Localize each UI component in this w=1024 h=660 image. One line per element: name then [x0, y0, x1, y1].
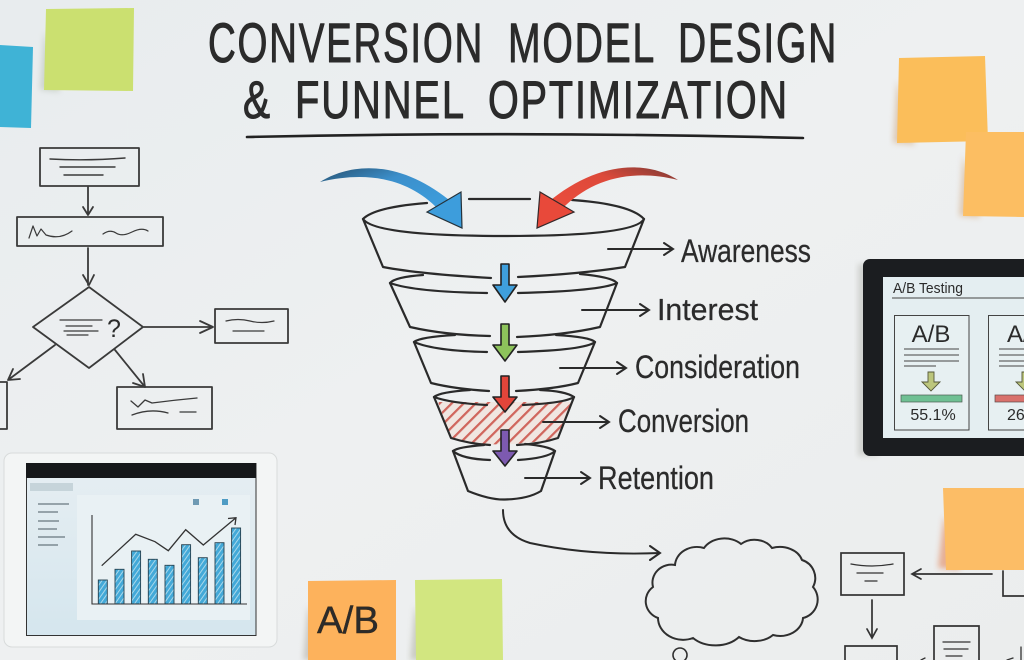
sticky note: orange A/B: A/B [317, 600, 379, 642]
flow arrow down right [115, 350, 145, 387]
step arrow blue [493, 264, 517, 302]
title word: OPTIMIZATION: OPTIMIZATION [488, 71, 789, 130]
partial arrow marks [921, 647, 1021, 660]
flow box 2 [17, 217, 163, 246]
tablet screen [883, 277, 1024, 438]
label: conversion: Conversion [618, 403, 749, 439]
funnel stage 4: conversion hatched [434, 390, 574, 445]
thought cloud [646, 538, 818, 660]
flow arrow down left [8, 345, 55, 380]
title word: DESIGN: DESIGN [678, 11, 838, 74]
decision diamond: ? [107, 315, 121, 343]
tablet shadow [858, 264, 878, 456]
funnel stage 2 [390, 274, 617, 337]
sticky note: orange right [959, 132, 1024, 218]
partial box right [1003, 571, 1024, 596]
screen heading: A/B Testing [893, 280, 963, 297]
sticky note: lime bottom [410, 579, 503, 660]
arrow left into box [912, 569, 992, 579]
flow box left [0, 382, 7, 429]
title word: FUNNEL: FUNNEL [295, 71, 466, 130]
blue entry arrow [320, 168, 462, 228]
label: consideration: Consideration [635, 349, 800, 385]
decision diamond [33, 287, 143, 368]
sticky note: lime top [40, 8, 134, 92]
pointer arrow: conversion [543, 416, 609, 428]
label: interest: Interest [657, 292, 758, 327]
flow arrow right [144, 321, 213, 333]
tablet frame [4, 453, 277, 647]
right tablet: A/B testing [858, 259, 1024, 456]
step arrow purple [493, 430, 517, 466]
pointer arrow: interest [582, 304, 649, 316]
title underline [247, 134, 803, 138]
flow box lower [117, 387, 212, 429]
title ampersand: & [243, 71, 272, 130]
pointer arrow: retention [525, 472, 590, 484]
tablet body [863, 259, 1024, 456]
funnel stage 5 [453, 444, 555, 500]
sidebar list [30, 483, 73, 545]
left tablet: chart dashboard [4, 453, 277, 647]
label: retention: Retention [598, 460, 714, 496]
sticky note: cyan [0, 45, 33, 128]
variant card B [988, 316, 1024, 430]
arrow down [867, 600, 877, 638]
lower box [845, 646, 897, 660]
funnel [320, 167, 678, 500]
flow arrow 1 [83, 187, 93, 215]
flow arrow 2 [83, 248, 94, 285]
label: awareness: Awareness [681, 233, 811, 269]
sticky note: orange top right [893, 56, 988, 145]
flowchart lower right [841, 553, 1024, 660]
tablet status bar [26, 463, 256, 478]
funnel stage 1 [363, 199, 644, 278]
title word: CONVERSION: CONVERSION [208, 11, 484, 74]
small flow box [841, 553, 904, 595]
step arrow red [493, 376, 517, 412]
output arrow to cloud [503, 510, 660, 560]
flow box right [215, 309, 288, 343]
document box [934, 626, 979, 660]
bar chart [92, 515, 247, 604]
funnel stage 3 [414, 335, 595, 391]
trend line [102, 518, 236, 566]
flow box 1 [40, 148, 139, 186]
tablet screen [26, 464, 256, 636]
title word: MODEL: MODEL [508, 11, 656, 74]
title [208, 11, 838, 138]
step arrow green [493, 324, 517, 361]
variant card A: A/B [912, 321, 950, 348]
variant card A [894, 316, 969, 430]
variant card A: 55.1% [910, 407, 956, 424]
pointer arrow: consideration [560, 362, 626, 374]
chart legend [193, 499, 228, 505]
sticky note: orange A/B [303, 580, 396, 660]
red entry arrow [537, 167, 678, 228]
chart panel [77, 495, 250, 620]
pointer arrow: awareness [608, 243, 673, 255]
sticky note: orange lower right [938, 488, 1024, 570]
flowchart left [0, 148, 288, 429]
